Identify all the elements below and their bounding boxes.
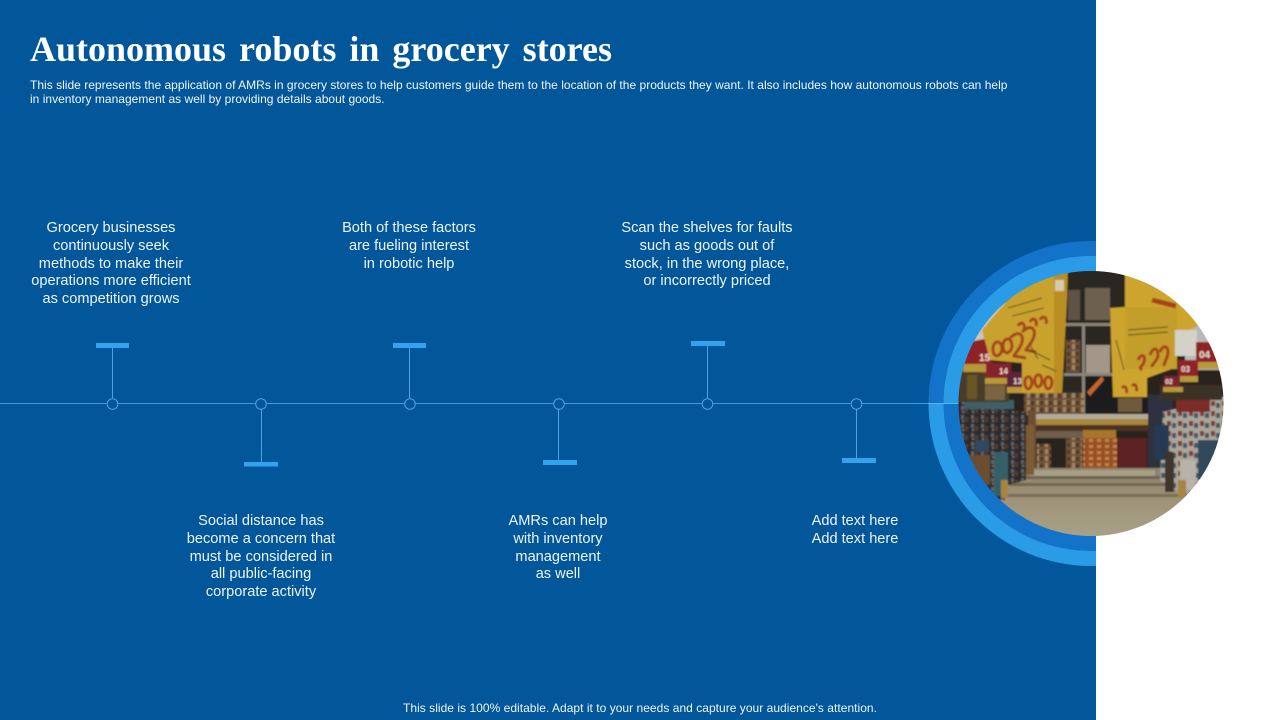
subtitle text block (30, 78, 1007, 106)
text: scan the shelves: stock, in the wrong place, (625, 256, 789, 272)
text: scan the shelves (621, 220, 793, 289)
text: social distance: corporate activity (206, 584, 316, 600)
text: social distance: become a concern that (187, 531, 335, 547)
text: social distance: must be considered in (190, 548, 332, 564)
text: fueling interest: in robotic help (364, 256, 454, 272)
text: inventory management: as well (536, 566, 580, 582)
text: grocery businesses: Grocery businesses (47, 220, 175, 236)
milestone 6 marker (842, 399, 876, 463)
store aisle numbers (979, 350, 1211, 386)
store aisle numbers: 15 (979, 353, 991, 364)
store aisle numbers: 02 (1165, 379, 1173, 386)
store aisle numbers: 13 (1013, 377, 1022, 386)
milestone 1 marker (96, 343, 129, 409)
sign scribbles (993, 282, 1184, 393)
timeline axis (0, 402, 932, 404)
text: fueling interest (342, 220, 476, 272)
store aisle numbers: 03 (1181, 365, 1190, 374)
store aisle numbers: 14 (999, 367, 1008, 376)
text: placeholder: Add text here (812, 513, 898, 529)
text: scan the shelves: Scan the shelves for faults (621, 220, 793, 236)
text: inventory management: AMRs can help (509, 513, 607, 529)
text: inventory management: with inventory (513, 531, 603, 547)
milestone 2 marker (244, 399, 278, 466)
subtitle text block: This slide represents the application of AMRs in grocery stores to help customers guide them to the location of the products they want. It also includes how autonomous robots can help (30, 78, 1007, 92)
subtitle text block: in inventory management as well by providing details about goods. (30, 92, 385, 106)
text: social distance: Social distance has (198, 513, 324, 529)
milestone 4 marker (543, 399, 577, 465)
milestone 5 marker (691, 341, 725, 409)
text: inventory management (508, 513, 607, 582)
text: inventory management: management (515, 548, 601, 564)
concentric half rings (928, 241, 1096, 566)
text: grocery businesses: operations more efficient (31, 273, 191, 289)
photo: grocery store aisle (955, 262, 1230, 540)
store aisle numbers: 04 (1199, 350, 1211, 361)
text: grocery businesses: as competition grows (42, 291, 180, 307)
text: social distance: all public-facing (211, 566, 311, 582)
timeline graphic and photo (0, 241, 1224, 566)
text: grocery businesses: methods to make their (39, 256, 183, 272)
text: grocery businesses (31, 220, 191, 307)
text: placeholder: Add text here (812, 531, 898, 547)
text: scan the shelves: or incorrectly priced (643, 273, 771, 289)
text: social distance (187, 513, 336, 600)
footer note: This slide is 100% editable. Adapt it to your needs and capture your audience's attention. (403, 701, 877, 715)
title: Autonomous robots in grocery stores (30, 29, 612, 69)
text: fueling interest: Both of these factors (342, 220, 476, 236)
text: fueling interest: are fueling interest (349, 238, 469, 254)
text: grocery businesses: continuously seek (53, 238, 169, 254)
milestone 3 marker (393, 343, 426, 409)
text: scan the shelves: such as goods out of (640, 238, 774, 254)
text: placeholder (812, 513, 898, 547)
